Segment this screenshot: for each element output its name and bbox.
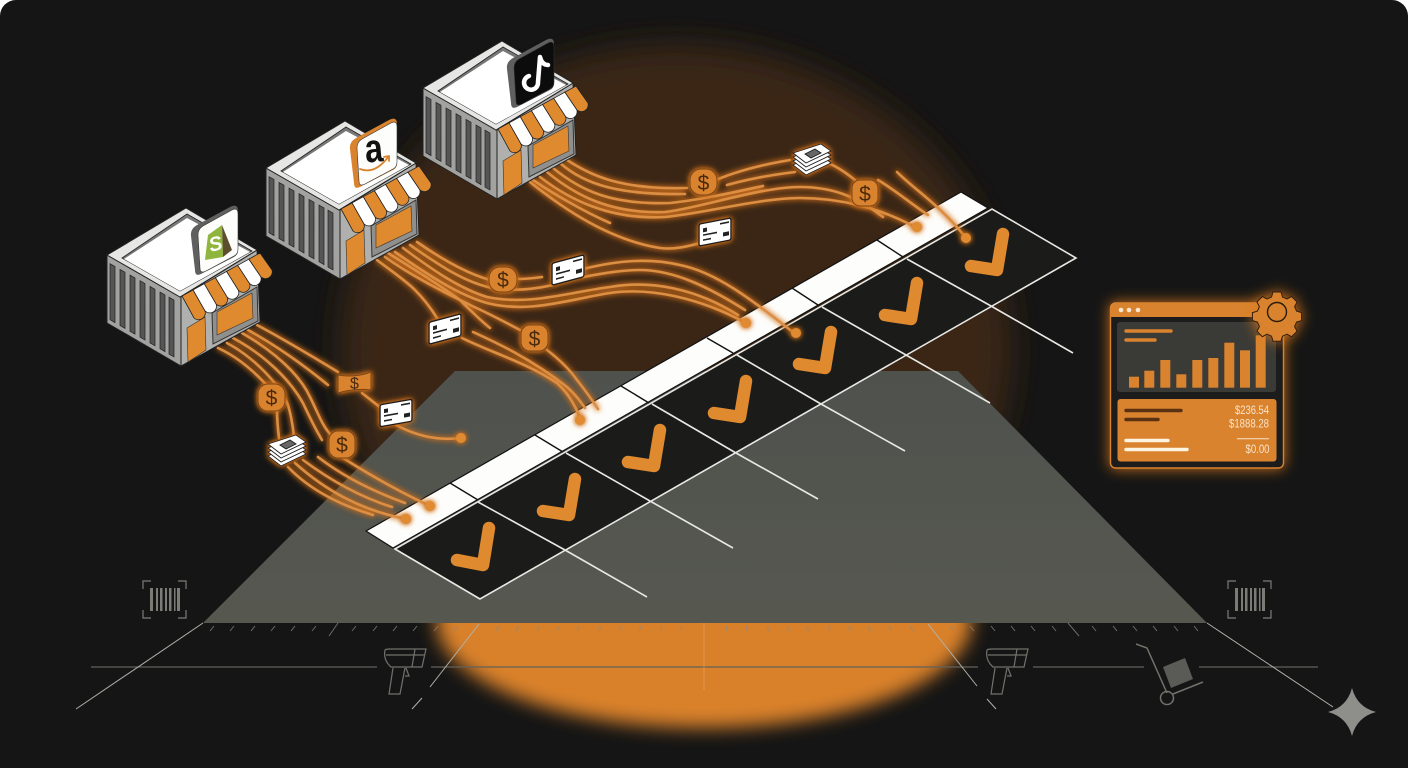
store: Amazon <box>266 119 431 279</box>
coin: $ <box>497 269 509 292</box>
icon: gear <box>1252 292 1302 341</box>
icon: right barcode <box>1228 581 1271 618</box>
icon: Amazon logo: a <box>363 126 385 172</box>
icon: left barcode <box>143 581 186 618</box>
bank note <box>338 372 371 393</box>
coin: $ <box>698 172 710 195</box>
window dots <box>1119 308 1140 312</box>
left wall <box>107 255 181 366</box>
totals white labels <box>1126 440 1187 450</box>
coin <box>489 267 517 292</box>
sign <box>507 39 554 108</box>
amount: $0.00 <box>1246 442 1270 456</box>
window <box>212 287 258 344</box>
roof <box>266 121 416 210</box>
roof <box>107 208 257 297</box>
roof <box>423 41 573 130</box>
totals panel <box>1118 399 1276 462</box>
coin: $ <box>266 387 278 410</box>
amount: $1888.28 <box>1229 416 1269 430</box>
flows: Shopify store <box>218 325 461 519</box>
bar chart <box>1129 335 1266 388</box>
coin: $ <box>529 328 541 351</box>
window <box>528 120 574 177</box>
grid lines <box>395 209 1076 599</box>
icon: sparkle <box>1328 688 1376 736</box>
cash bundle <box>268 435 306 466</box>
door <box>346 230 365 275</box>
chart legend lines <box>1126 331 1171 340</box>
front wall <box>181 250 260 366</box>
front wall <box>340 163 419 279</box>
store: Shopify <box>107 206 272 366</box>
front wall <box>497 83 576 199</box>
awning <box>182 253 272 320</box>
icon: Shopify bag <box>205 225 232 260</box>
centre line <box>703 623 705 690</box>
orange glow under the floor <box>0 623 1408 768</box>
sign <box>191 206 238 275</box>
coin <box>521 325 548 351</box>
floor ruler ticks <box>210 623 1198 636</box>
fulfilment grid <box>366 192 1076 599</box>
amount: $236.54 <box>1235 403 1269 417</box>
awning <box>498 86 588 153</box>
white strip <box>366 192 988 548</box>
grid cells <box>395 209 1076 599</box>
store: TikTok <box>423 39 588 199</box>
panel: dashboard <box>1110 292 1302 468</box>
conveyor baseline <box>91 666 1318 668</box>
brown glow behind the flows <box>341 45 1011 655</box>
totals labels <box>1126 410 1181 420</box>
flows: Amazon store <box>377 242 794 418</box>
icon: TikTok note <box>524 57 548 90</box>
check marks <box>457 234 1003 565</box>
warehouse floor <box>203 371 1207 623</box>
perspective lines <box>76 623 1333 709</box>
door <box>503 150 522 195</box>
coin <box>329 431 355 458</box>
coin <box>852 180 878 206</box>
strip dividers <box>450 240 903 500</box>
flow end dots <box>401 222 971 524</box>
wall ribs <box>110 264 174 357</box>
bank note: $ <box>350 376 359 392</box>
icon: Shopify bag: S <box>206 232 225 257</box>
icon: left scanner <box>385 649 426 694</box>
wall ribs <box>269 177 333 270</box>
cash bundle <box>793 144 831 175</box>
credit card <box>380 399 412 427</box>
sign <box>350 119 397 188</box>
wall ribs <box>426 97 490 190</box>
credit card <box>699 218 731 246</box>
title bar <box>1110 303 1284 317</box>
credit card <box>552 255 584 285</box>
door <box>187 317 206 362</box>
coin: $ <box>859 183 871 206</box>
coin <box>258 384 285 411</box>
awning <box>341 166 431 233</box>
left wall <box>423 88 497 199</box>
left wall <box>266 168 340 279</box>
window <box>371 200 417 257</box>
total rule <box>1237 438 1269 440</box>
coin <box>690 169 717 195</box>
credit card <box>429 314 461 344</box>
flows: TikTok store <box>530 160 966 249</box>
coin: $ <box>336 434 348 457</box>
chart panel <box>1117 322 1276 392</box>
icon: right scanner <box>987 649 1028 694</box>
icon: hand truck with box <box>1136 644 1203 704</box>
window frame <box>1110 303 1284 468</box>
